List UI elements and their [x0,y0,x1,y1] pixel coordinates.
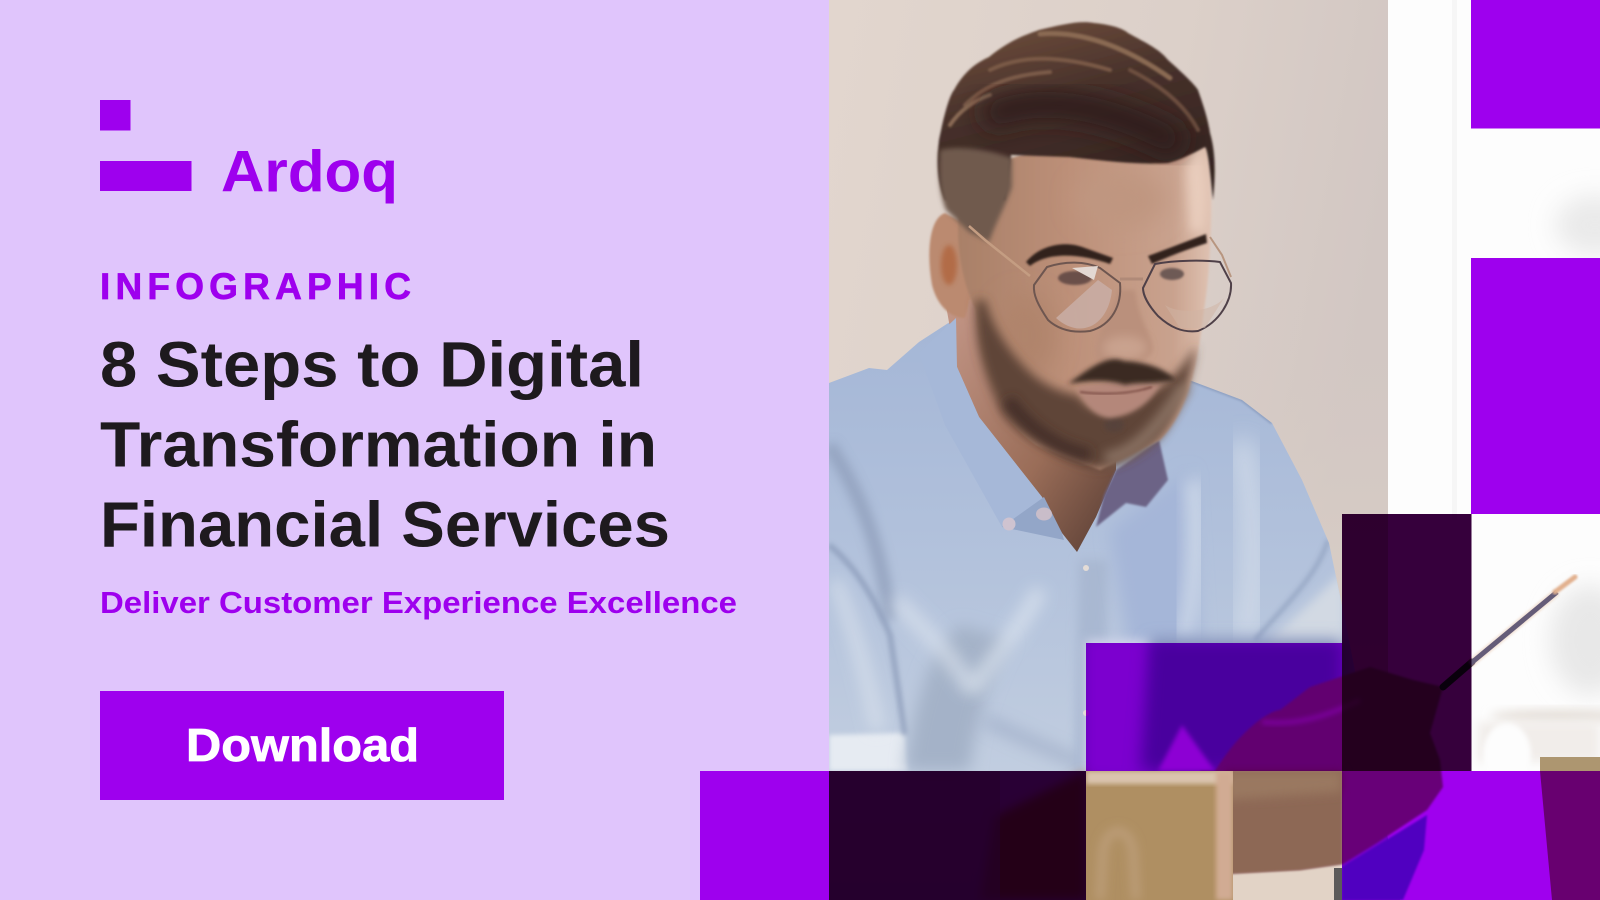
photo: blue sleeve at lower right [1342,815,1427,900]
photo: desk [1233,864,1342,900]
photo: mug on right [1540,757,1600,900]
subtitle: Deliver Customer Experience Excellence [100,585,737,620]
square: purple bottom left of photo [700,771,829,900]
photo: neck [945,290,1116,552]
logo wordmark: Ardoq [221,140,398,204]
overlay: dark multiply block bottom left [829,771,1086,900]
logo: Ardoq [100,100,398,204]
photo: face [958,141,1211,470]
photo: eyes [1058,268,1184,285]
overlay: purple multiply block bottom right [1342,771,1600,900]
title: Financial Services [100,489,670,561]
photo: left collar [949,318,1089,716]
photo: bright window [1388,0,1600,900]
photo: glasses [969,226,1231,332]
photo: beard [976,300,1196,468]
rectangle: purple middle right [1471,258,1600,514]
photo: right collar in shadow [1096,440,1168,527]
photo: hair [938,22,1215,242]
overlay: purple multiply block centre [1086,643,1342,771]
overlay: dark multiply block right [1342,514,1472,771]
photo: shirt shadow near left block [829,771,1000,900]
photo: pen [1443,577,1575,687]
photo: eyebrows [1026,234,1207,266]
photo: collar buttons [1002,508,1089,716]
button: Download [100,691,504,800]
photo: moustache [1068,359,1176,385]
photo: beige wall [829,0,1388,771]
photo: lips [1076,382,1160,418]
photo: lens reflections [1056,280,1112,329]
title [100,329,670,561]
square: purple top right [1471,0,1600,128]
photo: man with glasses at desk [829,0,1600,900]
title: 8 Steps to Digital [100,329,644,401]
photo: forearm and hand [1200,667,1443,874]
photo: shirt folds under purple block [1086,640,1342,775]
photo: hair strands [950,33,1198,130]
photo: coffee mug [1086,771,1233,900]
photo: face shading [1035,150,1207,355]
photo: ear [929,213,975,318]
title: Transformation in [100,409,657,481]
logo mark [100,100,192,191]
eyebrow label: INFOGRAPHIC [100,266,411,307]
photo: left forearm under dark block [980,771,1086,900]
photo: shirt [829,318,1400,900]
button: Download: Download [186,719,419,771]
